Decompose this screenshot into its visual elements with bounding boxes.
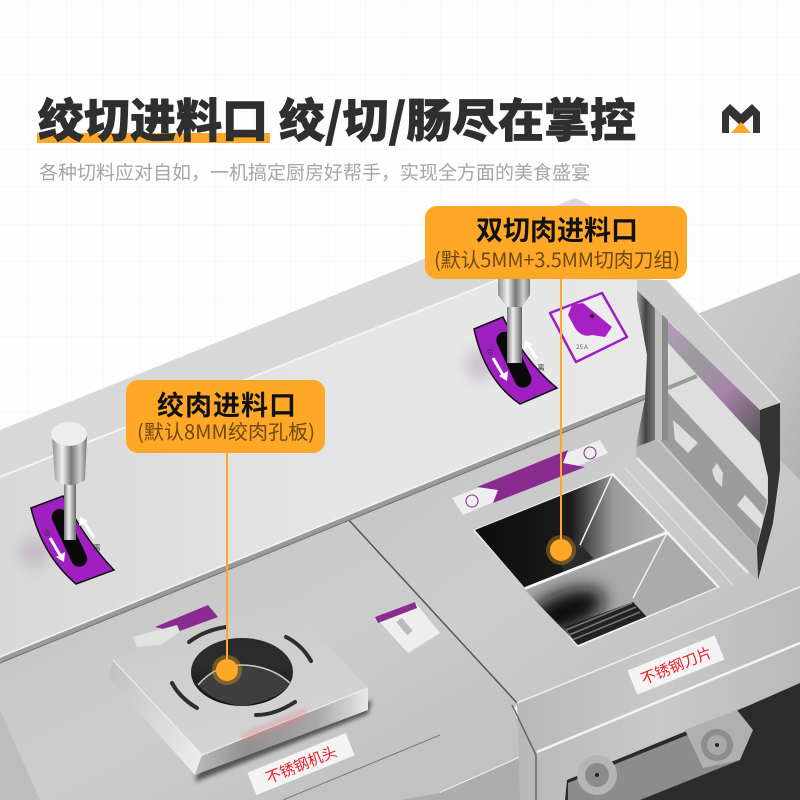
right lever: 合 [486, 347, 494, 357]
callout: grinder inlet: (默认8MM绞肉孔板) [137, 416, 315, 445]
lid frame [625, 280, 780, 585]
label: stainless steel blade: 不锈钢刀片 [637, 642, 715, 689]
lower compartment [525, 534, 717, 645]
left cutting plate [0, 518, 520, 800]
machine body [0, 198, 800, 800]
lower holed plate [660, 393, 767, 547]
label: stainless steel blade [628, 635, 724, 695]
left lever [21, 422, 114, 584]
left lever: 离 [94, 543, 100, 553]
callout: grinder inlet [126, 380, 325, 685]
left lower panel [0, 710, 40, 800]
mechanism under front edge [565, 683, 800, 800]
title [37, 85, 636, 151]
right lever: 离 [538, 363, 544, 373]
left lever: 合 [44, 528, 50, 538]
control panel [0, 279, 700, 660]
plate slots [172, 627, 311, 715]
rotary switch: 25 A [576, 342, 588, 351]
callout: double cut inlet: (默认5MM+3.5MM切肉刀组) [434, 244, 680, 273]
rear wall [0, 198, 660, 560]
sticker: grinder direction [133, 605, 218, 647]
label: stainless steel head [247, 733, 355, 795]
inner face [667, 320, 760, 443]
sticker: cutter direction [452, 440, 608, 515]
right lever [466, 279, 557, 404]
upper blades [560, 547, 593, 572]
cutting inlet: double hopper [473, 473, 720, 650]
icon: brand logo [722, 104, 760, 133]
grinder inlet plate [108, 605, 372, 782]
title: 绞切进料口 [38, 85, 268, 151]
callout: double cut inlet [425, 206, 687, 565]
rotary switch [550, 293, 627, 362]
window panel [668, 343, 768, 500]
title: 绞/切/肠尽在掌控 [279, 85, 636, 151]
hinge plate [636, 440, 757, 580]
rail [0, 375, 697, 660]
front face [517, 587, 800, 800]
label: stainless steel head: 不锈钢机头 [262, 741, 340, 788]
right cabinet [640, 273, 800, 600]
right cutting plate [347, 375, 800, 703]
warning sticker [375, 602, 440, 653]
right post [757, 403, 780, 580]
top bar [637, 280, 780, 410]
grinder bore [191, 638, 293, 706]
subtitle: 各种切料应对自如，一机搞定厨房好帮手，实现全方面的美食盛宴 [39, 158, 590, 185]
callout: grinder inlet: 绞肉进料口 [157, 384, 296, 423]
callout: double cut inlet: 双切肉进料口 [476, 209, 638, 248]
left post [636, 290, 655, 447]
rail through window [668, 376, 697, 388]
